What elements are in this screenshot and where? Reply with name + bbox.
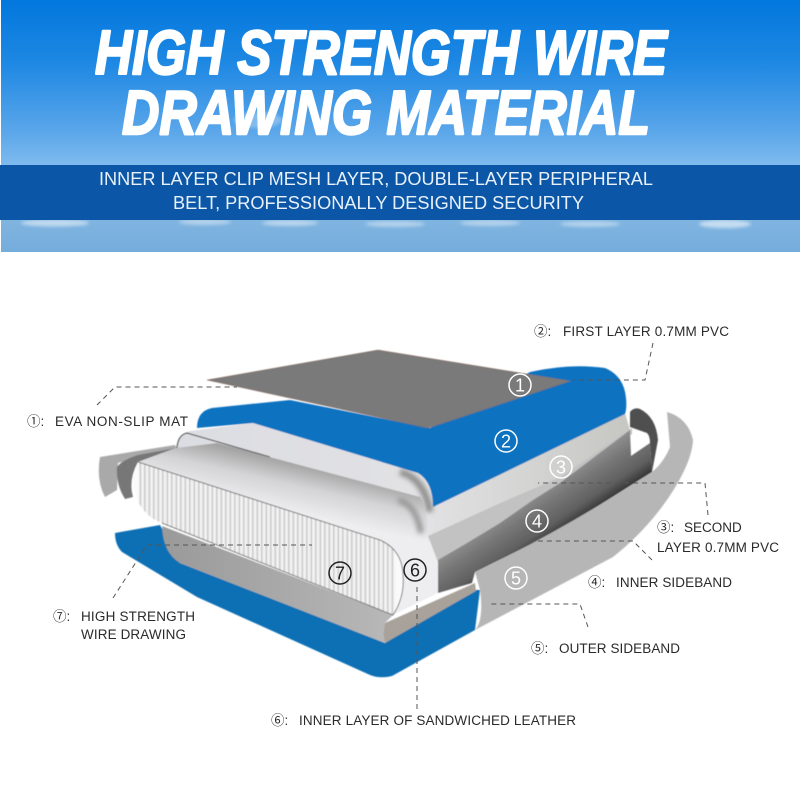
- labels: OUTER SIDEBAND: [559, 641, 680, 656]
- subtitle band: [0, 165, 800, 220]
- layer 2: blue first PVC: [197, 366, 626, 507]
- EVA non-slip mat: [207, 350, 570, 428]
- labels: FIRST LAYER 0.7MM PVC: [563, 324, 729, 339]
- pillow top: [138, 443, 438, 615]
- hatched wire drawing face: [133, 455, 403, 620]
- black circled markers: 7: [335, 564, 345, 584]
- leader lines: [97, 343, 708, 712]
- outer sideband left remnant: [99, 445, 177, 497]
- diagram: paddle board layers: [99, 350, 693, 677]
- white circled markers: [495, 374, 572, 589]
- white circled markers: 1: [515, 376, 525, 396]
- labels: SECOND: [684, 520, 742, 535]
- labels: ③:: [657, 520, 674, 535]
- subtitle band: BELT, PROFESSIONALLY DESIGNED SECURITY: [173, 193, 584, 213]
- white circled markers: 4: [532, 512, 542, 532]
- title: DRAWING MATERIAL: [122, 79, 650, 148]
- pillow right groove shadow: [398, 500, 421, 533]
- labels: ⑦:: [53, 609, 70, 624]
- labels: HIGH STRENGTH: [81, 609, 195, 624]
- inner layer of sandwiched leather (lower): [162, 526, 393, 643]
- inner sideband dark strip: [438, 430, 652, 593]
- labels: ②:: [534, 324, 551, 339]
- title: HIGH STRENGTH WIRE: [95, 19, 668, 88]
- labels: ⑥:: [271, 713, 288, 728]
- labels: WIRE DRAWING: [81, 627, 186, 642]
- leather strip right: [384, 583, 476, 643]
- outer sideband: [475, 412, 693, 630]
- labels: LAYER 0.7MM PVC: [657, 540, 779, 555]
- labels: ④:: [588, 575, 605, 590]
- subtitle band: INNER LAYER CLIP MESH LAYER, DOUBLE-LAYER PERIPHERAL: [99, 169, 653, 189]
- black circled markers: [329, 559, 426, 584]
- white circled markers: 3: [556, 458, 566, 478]
- white circled markers: 2: [501, 432, 511, 452]
- bottom blue layer: [115, 525, 480, 677]
- labels: ①:: [27, 414, 44, 429]
- labels: EVA NON-SLIP MAT: [55, 414, 188, 429]
- layer 3: second PVC: [177, 413, 630, 536]
- layer 3 shadow under blue curve: [400, 472, 430, 512]
- black circled markers: 6: [410, 560, 420, 580]
- labels: [27, 324, 779, 728]
- sky banner background: [1, 0, 800, 252]
- inner sideband left remnant: [117, 448, 176, 499]
- labels: ⑤:: [531, 641, 548, 656]
- labels: INNER SIDEBAND: [616, 575, 732, 590]
- labels: INNER LAYER OF SANDWICHED LEATHER: [299, 713, 576, 728]
- gray blend above inner sideband: [428, 428, 632, 562]
- inner sideband curl: [630, 408, 658, 472]
- layer 3 outline: [177, 433, 270, 457]
- title: [95, 19, 668, 148]
- white circled markers: 5: [511, 568, 521, 588]
